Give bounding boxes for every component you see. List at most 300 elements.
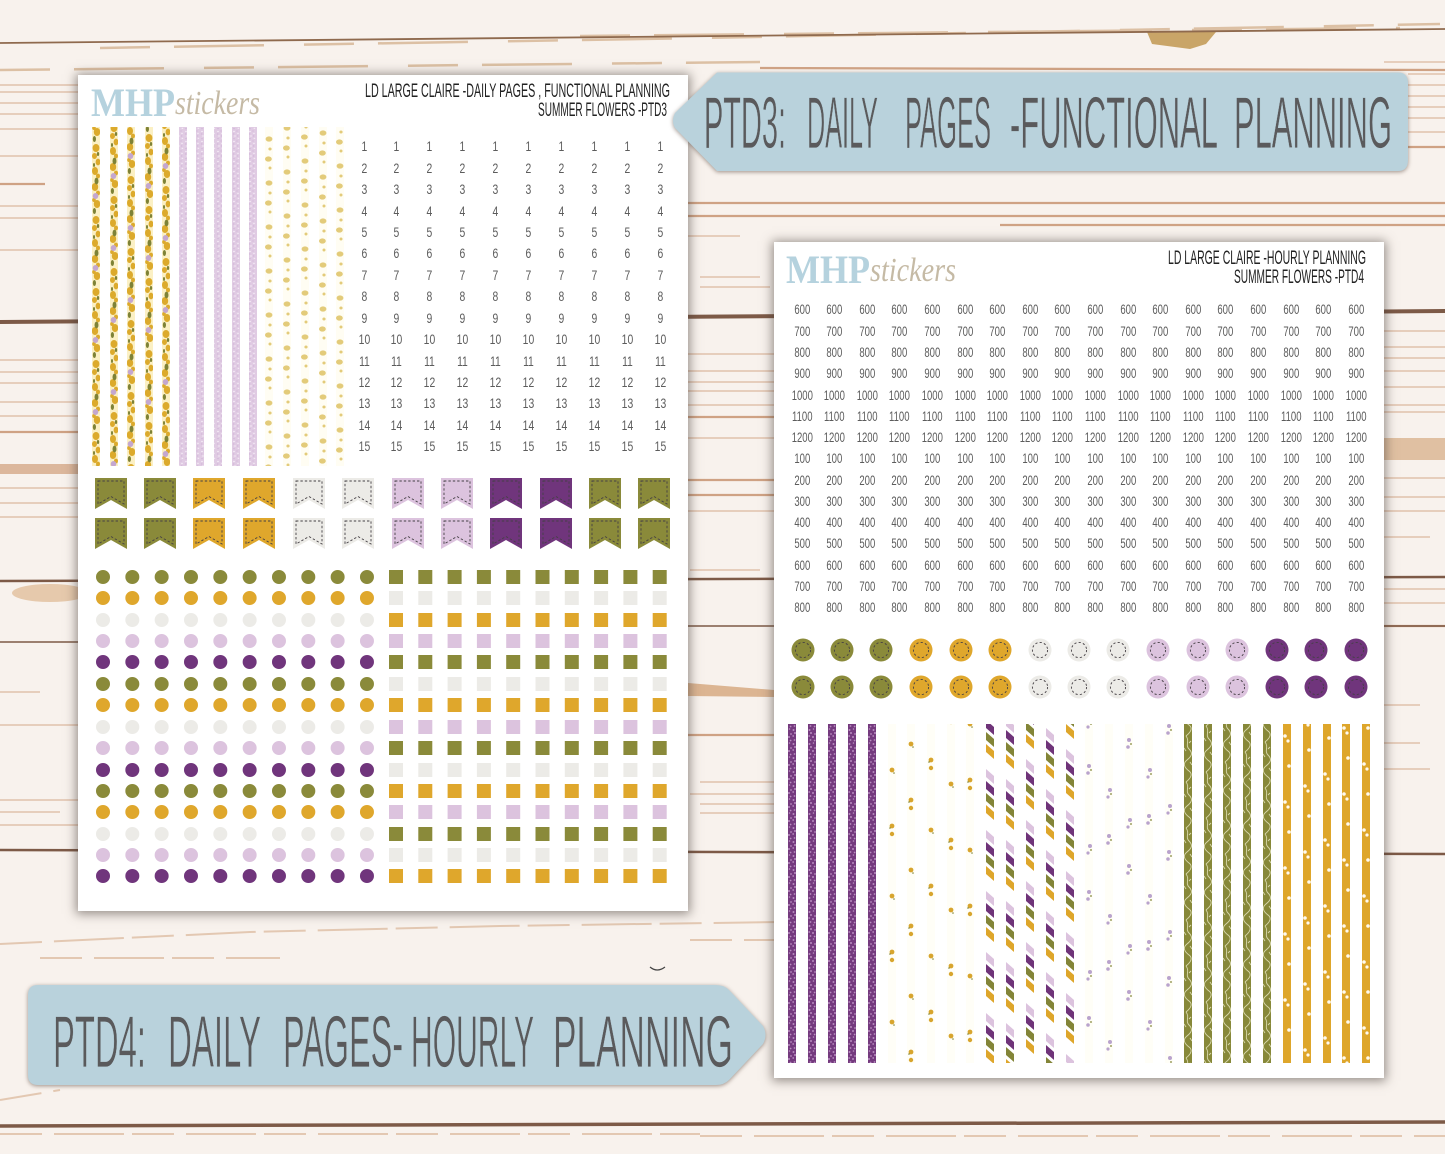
banner: PTD4: PTD4: <box>53 1002 146 1083</box>
date number grid: 1 <box>526 138 531 154</box>
hourly time grid: 100 <box>1022 450 1038 466</box>
hourly time grid: 600 <box>957 557 973 573</box>
date number grid: 9 <box>558 310 564 326</box>
date number grid: 10 <box>490 331 501 347</box>
hourly time grid: 600 <box>1218 301 1234 317</box>
hourly time grid: 1000 <box>987 387 1008 403</box>
date number grid: 4 <box>624 203 630 219</box>
hourly time grid: 1200 <box>1052 429 1073 445</box>
hourly time grid: 600 <box>924 557 940 573</box>
hourly time grid: 600 <box>1185 557 1201 573</box>
hourly time grid: 1100 <box>1183 408 1203 424</box>
date number grid: 5 <box>558 224 564 240</box>
hourly time grid: 400 <box>1348 514 1364 530</box>
date number grid: 15 <box>523 438 534 454</box>
date number grid: 1 <box>493 138 498 154</box>
hourly time grid: 600 <box>1348 301 1364 317</box>
hourly time grid: 700 <box>859 323 875 339</box>
date number grid: 15 <box>588 438 600 454</box>
hourly time grid: 1100 <box>1020 408 1040 424</box>
hourly time grid: 1200 <box>1150 429 1171 445</box>
date number grid: 13 <box>556 395 567 411</box>
hourly time grid: 900 <box>957 365 973 381</box>
hourly time grid: 1000 <box>1150 387 1171 403</box>
date number grid: 3 <box>427 181 433 197</box>
date number grid: 3 <box>493 181 498 197</box>
hourly time grid: 500 <box>892 535 908 551</box>
hourly time grid: 800 <box>957 344 973 360</box>
hourly time grid: 400 <box>892 514 908 530</box>
hourly time grid: 200 <box>1087 472 1103 488</box>
hourly time grid: 800 <box>1283 599 1299 615</box>
hourly time grid: 600 <box>794 301 810 317</box>
hourly time grid: 300 <box>859 493 875 509</box>
date number grid: 5 <box>493 224 498 240</box>
date number grid: 7 <box>427 267 433 283</box>
hourly time grid: 900 <box>1022 365 1038 381</box>
hourly time grid: 300 <box>1316 493 1331 509</box>
date number grid: 15 <box>457 438 468 454</box>
hourly time grid: 100 <box>1185 450 1201 466</box>
hourly time grid: 400 <box>827 514 843 530</box>
date number grid: 3 <box>558 181 564 197</box>
hourly time grid: 1200 <box>1085 429 1106 445</box>
date number grid: 9 <box>361 310 367 326</box>
hourly time grid: 300 <box>1283 493 1299 509</box>
date number grid: 6 <box>493 245 498 261</box>
hourly time grid: 1100 <box>824 408 845 424</box>
square stickers <box>389 577 668 876</box>
date number grid: 13 <box>457 395 468 411</box>
hourly time grid: 800 <box>1218 599 1234 615</box>
hourly time grid: 700 <box>1283 578 1299 594</box>
date number grid: 13 <box>654 395 666 411</box>
hourly time grid: 600 <box>827 557 843 573</box>
hourly time grid: 1100 <box>987 408 1008 424</box>
hourly time grid: 1100 <box>1150 408 1171 424</box>
hourly time grid: 800 <box>1022 344 1038 360</box>
date number grid: 2 <box>361 160 367 176</box>
date number grid: 4 <box>427 203 433 219</box>
date number grid: 4 <box>657 203 663 219</box>
hourly time grid: 200 <box>1218 472 1234 488</box>
date number grid: 7 <box>591 267 597 283</box>
date number grid: 7 <box>394 267 400 283</box>
hourly time grid: 700 <box>1087 578 1103 594</box>
hourly time grid: 900 <box>1185 365 1201 381</box>
hourly time grid: 900 <box>1316 365 1331 381</box>
date number grid: 4 <box>460 203 466 219</box>
date number grid: 12 <box>490 374 501 390</box>
hourly time grid: 500 <box>827 535 843 551</box>
hourly time grid: 100 <box>1153 450 1168 466</box>
date number grid: 2 <box>591 160 597 176</box>
date number grid: 7 <box>493 267 498 283</box>
date number grid: 2 <box>526 160 531 176</box>
hourly time grid: 300 <box>1153 493 1168 509</box>
hourly time grid: 1000 <box>1248 387 1269 403</box>
floral gold stripes <box>92 127 170 466</box>
date number grid: 5 <box>591 224 597 240</box>
date number grid: 1 <box>558 138 564 154</box>
hourly time grid: 700 <box>827 578 843 594</box>
hourly time grid: 400 <box>1250 514 1266 530</box>
date number grid: 1 <box>394 138 400 154</box>
hourly time grid: 800 <box>1153 344 1168 360</box>
date number grid: 3 <box>361 181 367 197</box>
hourly time grid: 200 <box>794 472 810 488</box>
banner: PTD4: PAGES- <box>283 1002 403 1083</box>
date number grid: 14 <box>654 417 666 433</box>
hourly time grid: 800 <box>859 344 875 360</box>
date number grid: 10 <box>391 331 403 347</box>
hourly time grid: 100 <box>957 450 973 466</box>
hourly time grid: 500 <box>1283 535 1299 551</box>
hourly time grid: 700 <box>1185 578 1201 594</box>
logo: MHP stickers: stickers <box>175 85 260 122</box>
hourly time grid: 1100 <box>1215 408 1236 424</box>
hourly time grid: 600 <box>1153 301 1168 317</box>
hourly time grid: 1000 <box>1215 387 1236 403</box>
hourly time grid: 1200 <box>1117 429 1139 445</box>
banner: PTD4: DAILY <box>168 1002 261 1083</box>
hourly time grid: 1200 <box>857 429 878 445</box>
hourly time grid: 1200 <box>1313 429 1334 445</box>
hourly time grid: 300 <box>1120 493 1136 509</box>
hourly time grid: 500 <box>1185 535 1201 551</box>
hourly time grid: 200 <box>1250 472 1266 488</box>
date number grid: 3 <box>657 181 663 197</box>
date number grid: 8 <box>558 288 564 304</box>
date number grid: 3 <box>591 181 597 197</box>
date number grid: 10 <box>457 331 468 347</box>
date number grid: 4 <box>361 203 367 219</box>
logo: MHP stickers: MHP <box>91 80 175 125</box>
date number grid: 15 <box>391 438 403 454</box>
date number grid: 4 <box>493 203 498 219</box>
date number grid: 8 <box>493 288 498 304</box>
hourly time grid: 900 <box>1250 365 1266 381</box>
date number grid: 5 <box>361 224 367 240</box>
hourly time grid: 1100 <box>922 408 943 424</box>
hourly time grid: 800 <box>1087 344 1103 360</box>
date number grid: 11 <box>622 353 632 369</box>
date number grid: 14 <box>556 417 567 433</box>
date number grid: 11 <box>359 353 369 369</box>
hourly time grid: 1100 <box>1085 408 1106 424</box>
hourly time grid: 600 <box>1087 301 1103 317</box>
hourly time grid: 1200 <box>791 429 813 445</box>
hourly time grid: 200 <box>827 472 843 488</box>
date number grid: 2 <box>657 160 663 176</box>
hourly time grid: 500 <box>1055 535 1071 551</box>
hourly time grid: 700 <box>1316 578 1331 594</box>
date number grid: 14 <box>588 417 600 433</box>
hourly time grid: 600 <box>859 301 875 317</box>
date number grid: 14 <box>391 417 403 433</box>
hourly time grid: 1000 <box>954 387 976 403</box>
olive patterned stripes <box>1184 724 1271 1063</box>
pale yellow floral stripes <box>265 127 344 466</box>
purple glitter stripes <box>788 724 876 1063</box>
hourly time grid: 100 <box>924 450 940 466</box>
date number grid: 11 <box>490 353 501 369</box>
date number grid: 15 <box>424 438 435 454</box>
date number grid: 7 <box>526 267 531 283</box>
date number grid: 3 <box>526 181 531 197</box>
date number grid: 6 <box>460 245 466 261</box>
hourly time grid: 400 <box>1283 514 1299 530</box>
hourly time grid: 300 <box>892 493 908 509</box>
mustard floral stripes <box>1283 724 1370 1063</box>
diagonal striped stripes <box>986 724 1074 1063</box>
hourly time grid: 800 <box>1283 344 1299 360</box>
date number grid: 9 <box>657 310 663 326</box>
hourly time grid: 200 <box>1283 472 1299 488</box>
hourly time grid: 600 <box>990 557 1005 573</box>
hourly time grid: 800 <box>1316 344 1331 360</box>
date number grid: 13 <box>588 395 600 411</box>
hourly time grid: 800 <box>1185 599 1201 615</box>
date number grid: 8 <box>657 288 663 304</box>
date number grid: 3 <box>460 181 466 197</box>
hourly time grid: 200 <box>859 472 875 488</box>
hourly time grid: 100 <box>1250 450 1266 466</box>
date number grid: 4 <box>394 203 400 219</box>
hourly time grid: 1100 <box>1313 408 1334 424</box>
hourly time grid: 700 <box>924 578 940 594</box>
hourly time grid: 900 <box>1055 365 1071 381</box>
hourly time grid: 600 <box>1348 557 1364 573</box>
hourly time grid: 600 <box>1283 301 1299 317</box>
date number grid: 2 <box>558 160 564 176</box>
date number grid: 5 <box>526 224 531 240</box>
date number grid: 12 <box>654 374 666 390</box>
date number grid: 2 <box>427 160 433 176</box>
date number grid: 10 <box>523 331 534 347</box>
hourly time grid: 500 <box>859 535 875 551</box>
hourly time grid: 100 <box>892 450 908 466</box>
hourly time grid: 100 <box>1348 450 1364 466</box>
hourly time grid: 100 <box>1055 450 1071 466</box>
hourly time grid: 400 <box>924 514 940 530</box>
date number grid: 9 <box>591 310 597 326</box>
hourly time grid: 800 <box>924 344 940 360</box>
hourly time grid: 1000 <box>922 387 943 403</box>
hourly time grid: 300 <box>827 493 843 509</box>
hourly time grid: 700 <box>859 578 875 594</box>
hourly time grid: 500 <box>1022 535 1038 551</box>
hourly time grid: 100 <box>827 450 843 466</box>
hourly time grid: 1000 <box>1183 387 1204 403</box>
hourly time grid: 200 <box>990 472 1005 488</box>
hourly time grid: 200 <box>957 472 973 488</box>
hourly time grid: 1100 <box>890 408 910 424</box>
hourly time grid: 800 <box>794 599 810 615</box>
date number grid: 7 <box>558 267 564 283</box>
date number grid: 13 <box>523 395 534 411</box>
hourly time grid: 700 <box>1087 323 1103 339</box>
date number grid: 9 <box>394 310 400 326</box>
banner: PTD3: DAILY <box>807 83 878 164</box>
date number grid: 12 <box>556 374 567 390</box>
hourly time grid: 600 <box>1087 557 1103 573</box>
date number grid: 8 <box>526 288 531 304</box>
hourly time grid: 800 <box>794 344 810 360</box>
hourly time grid: 900 <box>1120 365 1136 381</box>
hourly time grid: 300 <box>1348 493 1364 509</box>
hourly time grid: 1100 <box>1052 408 1073 424</box>
hourly time grid: 700 <box>1250 578 1266 594</box>
date number grid <box>358 138 666 454</box>
date number grid: 14 <box>457 417 468 433</box>
hourly time grid: 100 <box>1218 450 1234 466</box>
hourly time grid: 600 <box>892 301 908 317</box>
hourly time grid: 600 <box>892 557 908 573</box>
date number grid: 6 <box>361 245 367 261</box>
hourly time grid: 400 <box>1120 514 1136 530</box>
date number grid: 14 <box>490 417 501 433</box>
banner: PTD4 <box>28 985 766 1085</box>
hourly time grid: 500 <box>1120 535 1136 551</box>
hourly time grid: 200 <box>1022 472 1038 488</box>
hourly time grid: 1000 <box>1117 387 1139 403</box>
hourly time grid: 800 <box>1316 599 1331 615</box>
hourly time grid: 800 <box>892 344 908 360</box>
hourly time grid: 400 <box>1153 514 1168 530</box>
cream stripes with gold flowers <box>888 724 974 1063</box>
hourly time grid: 700 <box>1022 323 1038 339</box>
hourly time grid: 900 <box>924 365 940 381</box>
date number grid: 6 <box>624 245 630 261</box>
hourly time grid: 800 <box>990 344 1005 360</box>
hourly time grid: 100 <box>1283 450 1299 466</box>
date number grid: 13 <box>621 395 633 411</box>
date number grid: 15 <box>654 438 666 454</box>
hourly time grid: 500 <box>794 535 810 551</box>
date number grid: 1 <box>624 138 630 154</box>
hourly time grid: 700 <box>1185 323 1201 339</box>
hourly time grid: 200 <box>1316 472 1331 488</box>
hourly time grid: 600 <box>1185 301 1201 317</box>
hourly time grid: 1200 <box>824 429 845 445</box>
date number grid: 9 <box>624 310 630 326</box>
date number grid: 14 <box>358 417 370 433</box>
date number grid: 11 <box>556 353 567 369</box>
hourly time grid: 300 <box>1185 493 1201 509</box>
hourly time grid: 1100 <box>1248 408 1269 424</box>
hourly time grid: 300 <box>957 493 973 509</box>
hourly time grid: 1200 <box>1183 429 1204 445</box>
hourly time grid: 600 <box>794 557 810 573</box>
hourly time grid: 900 <box>1218 365 1234 381</box>
hourly time grid: 700 <box>827 323 843 339</box>
hourly time grid: 400 <box>1055 514 1071 530</box>
date number grid: 8 <box>427 288 433 304</box>
hourly time grid: 500 <box>990 535 1005 551</box>
date number grid: 1 <box>460 138 466 154</box>
date number grid: 11 <box>391 353 402 369</box>
hourly time grid: 700 <box>1055 323 1071 339</box>
hourly time grid: 100 <box>1120 450 1136 466</box>
hourly time grid: 800 <box>1120 599 1136 615</box>
date number grid: 9 <box>460 310 466 326</box>
hourly time grid: 900 <box>1087 365 1103 381</box>
hourly time grid: 400 <box>859 514 875 530</box>
banner: PTD3: PTD3: <box>704 83 786 164</box>
date number grid: 6 <box>526 245 531 261</box>
date number grid: 13 <box>490 395 501 411</box>
hourly time grid: 800 <box>1250 344 1266 360</box>
date number grid: 8 <box>394 288 400 304</box>
hourly time grid: 500 <box>1250 535 1266 551</box>
date number grid: 1 <box>657 138 663 154</box>
date number grid: 8 <box>361 288 367 304</box>
hourly time grid: 100 <box>1316 450 1331 466</box>
date number grid: 8 <box>591 288 597 304</box>
hourly time grid: 300 <box>1087 493 1103 509</box>
date number grid: 5 <box>624 224 630 240</box>
hourly time grid: 600 <box>1250 301 1266 317</box>
date number grid: 11 <box>424 353 435 369</box>
hourly time grid: 1000 <box>889 387 910 403</box>
date number grid: 12 <box>523 374 534 390</box>
hourly time grid: 600 <box>1218 557 1234 573</box>
hourly time grid: 500 <box>957 535 973 551</box>
hourly time grid: 200 <box>1348 472 1364 488</box>
hourly time grid: 600 <box>957 301 973 317</box>
date number grid: 14 <box>621 417 633 433</box>
hourly time grid: 700 <box>1153 578 1168 594</box>
date number grid: 8 <box>624 288 630 304</box>
hourly time grid: 600 <box>1022 557 1038 573</box>
date number grid: 2 <box>460 160 466 176</box>
hourly time grid: 1100 <box>792 408 812 424</box>
hourly time grid: 1200 <box>1248 429 1269 445</box>
banner: PTD3 <box>673 72 1408 171</box>
hourly time grid: 500 <box>1218 535 1234 551</box>
hourly time grid: 800 <box>1218 344 1234 360</box>
hourly time grid: 200 <box>1185 472 1201 488</box>
date number grid: 10 <box>358 331 370 347</box>
hourly time grid: 1200 <box>1020 429 1041 445</box>
hourly time grid: 100 <box>990 450 1005 466</box>
hourly time grid: 1000 <box>1313 387 1334 403</box>
date number grid: 6 <box>657 245 663 261</box>
hourly time grid: 400 <box>1087 514 1103 530</box>
hourly time grid: 1000 <box>857 387 878 403</box>
hourly time grid: 800 <box>924 599 940 615</box>
date number grid: 6 <box>591 245 597 261</box>
hourly time grid: 1000 <box>1052 387 1073 403</box>
hourly time grid: 800 <box>1055 599 1071 615</box>
hourly time grid: 700 <box>1055 578 1071 594</box>
date number grid: 10 <box>654 331 666 347</box>
date number grid: 12 <box>588 374 600 390</box>
hourly time grid: 700 <box>1348 323 1364 339</box>
date number grid: 1 <box>591 138 597 154</box>
hourly time grid: 1200 <box>889 429 910 445</box>
date number grid: 3 <box>394 181 400 197</box>
hourly time grid: 900 <box>827 365 843 381</box>
hourly time grid: 600 <box>1316 557 1331 573</box>
hourly time grid: 700 <box>924 323 940 339</box>
hourly time grid: 600 <box>859 557 875 573</box>
date number grid: 7 <box>361 267 367 283</box>
date number grid: 12 <box>391 374 403 390</box>
date number grid: 10 <box>556 331 567 347</box>
hourly time grid: 700 <box>1218 578 1234 594</box>
